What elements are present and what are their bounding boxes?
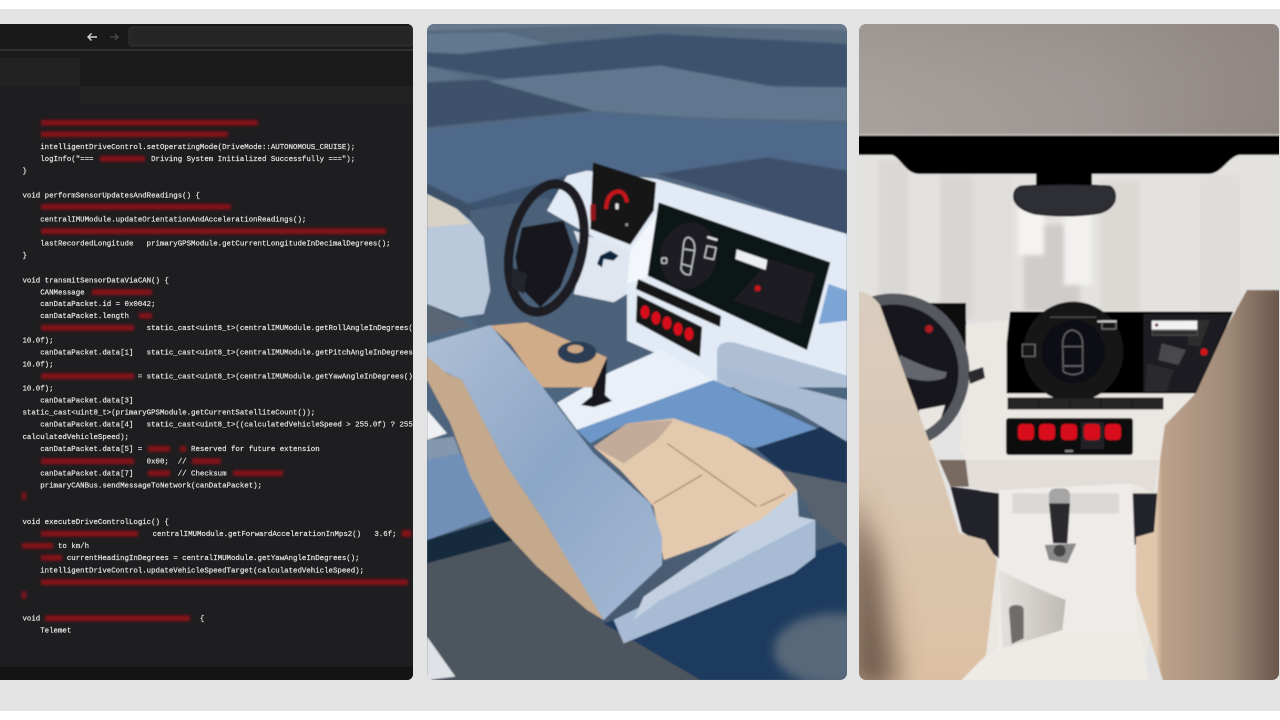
- code listing: centralIMUModule.updateOrientationAndAccelerationReadings();: [22, 216, 306, 224]
- panel: code editor: [0, 24, 431, 680]
- code listing: Telemet: [22, 628, 71, 636]
- code listing: 10.0f);: [22, 362, 54, 370]
- floor under the dash: [470, 198, 648, 364]
- icon: forward arrow: [110, 34, 118, 40]
- map tiles: [1143, 314, 1230, 392]
- icon: red marker: [755, 285, 761, 291]
- editor tab strip: [0, 51, 413, 104]
- location card: [1152, 321, 1197, 330]
- steering wheel: [498, 177, 619, 319]
- gear shifter: [581, 358, 612, 407]
- panel: isometric cockpit render: [427, 24, 847, 680]
- code listing: void {: [22, 616, 204, 624]
- code listing: static_cast<uint8_t>(primaryGPSModule.getCurrentSatelliteCount());: [22, 410, 315, 418]
- code listing: canDataPacket.data[5] = Reserved for future extension: [22, 446, 320, 454]
- icon: car outline: [662, 237, 716, 275]
- climate slot row: [1008, 398, 1163, 409]
- editor toolbar: [0, 24, 413, 51]
- code listing: canDataPacket.id = 0x0042;: [22, 301, 156, 309]
- code listing: [22, 144, 431, 636]
- footwell: [939, 460, 1161, 682]
- code listing: canDataPacket.data[3]: [22, 398, 133, 406]
- code listing: void executeDriveControlLogic() {: [22, 519, 169, 527]
- code listing: 10.0f);: [22, 386, 54, 394]
- location card: [735, 249, 767, 270]
- code listing: currentHeadingInDegrees = centralIMUModule.getYawAngleInDegrees();: [22, 555, 360, 563]
- icon: back arrow: [88, 34, 97, 40]
- code listing: calculatedVehicleSpeed);: [22, 434, 129, 442]
- code listing: }: [22, 252, 27, 260]
- code listing: canDataPacket.length: [22, 313, 129, 321]
- dashboard: [547, 171, 847, 387]
- rear seat cushion: [490, 322, 607, 387]
- code listing: 10.0f);: [22, 338, 54, 346]
- windshield frame: [849, 135, 1280, 185]
- left seat shadow: [849, 490, 898, 690]
- seat backrest: [427, 325, 662, 620]
- code listing: void transmitSensorDataViaCAN() {: [22, 278, 169, 286]
- code listing: }: [22, 168, 27, 176]
- rear-view mirror: [1014, 184, 1115, 216]
- steering wheel: [871, 292, 986, 442]
- center console: [557, 350, 847, 448]
- right front seat: [1136, 290, 1280, 690]
- dashboard body: [960, 310, 1240, 690]
- code listing: static_cast<uint8_t>(centralIMUModule.getRollAngleInDegrees() *: [22, 325, 426, 333]
- left front seat: [849, 291, 997, 690]
- center touchscreen: [1007, 302, 1233, 402]
- redacted code highlights: [22, 120, 411, 621]
- code listing: to km/h: [22, 543, 89, 551]
- code listing: canDataPacket.data[4] static_cast<uint8_t>((calculatedVehicleSpeed > 255.0f) ? 255 :: [22, 422, 422, 430]
- climate button panel: [1006, 418, 1133, 455]
- code listing: centralIMUModule.getForwardAccelerationInMps2() 3.6f;: [24, 531, 397, 539]
- code listing: intelligentDriveControl.setOperatingMode(DriveMode::AUTONOMOUS_CRUISE);: [22, 144, 355, 152]
- passenger seat side: [427, 194, 490, 336]
- floor tiles: [427, 24, 847, 317]
- icon: red marker: [1200, 348, 1208, 356]
- code listing: canDataPacket.data[1] static_cast<uint8_t>(centralIMUModule.getPitchAngleInDegrees() *: [22, 350, 431, 358]
- editor status bar: [0, 667, 413, 680]
- code listing: = static_cast<uint8_t>(centralIMUModule.getYawAngleInDegrees() *: [22, 374, 422, 382]
- parking brake rod: [1009, 605, 1024, 644]
- code listing: canDataPacket.data[7] // Checksum: [22, 470, 227, 478]
- gear stick: [1045, 488, 1076, 563]
- window and city skyline: [849, 150, 1280, 320]
- code listing: primaryCANBus.sendMessageToNetwork(canDataPacket);: [22, 482, 262, 490]
- code listing: logInfo("=== Driving System Initialized Successfully ===");: [22, 156, 355, 164]
- code listing: void performSensorUpdatesAndReadings() {: [22, 192, 200, 200]
- driver display: [590, 162, 656, 245]
- seat cushion: [594, 418, 815, 643]
- small instrument screen: [925, 303, 966, 348]
- code listing: intelligentDriveControl.updateVehicleSpeedTarget(calculatedVehicleSpeed);: [22, 568, 364, 576]
- center touchscreen: [648, 202, 830, 350]
- icon: car outline: [1022, 321, 1116, 374]
- climate button panel: [636, 295, 702, 357]
- code listing: CANMessage: [22, 290, 85, 298]
- floor and shadow around the seat: [427, 410, 847, 680]
- panel: front cockpit render: [859, 24, 1279, 680]
- code listing: lastRecordedLongitude primaryGPSModule.getCurrentLongitudeInDecimalDegrees();: [22, 240, 391, 248]
- climate slot: [636, 279, 721, 327]
- code listing: 0x00; //: [22, 458, 187, 466]
